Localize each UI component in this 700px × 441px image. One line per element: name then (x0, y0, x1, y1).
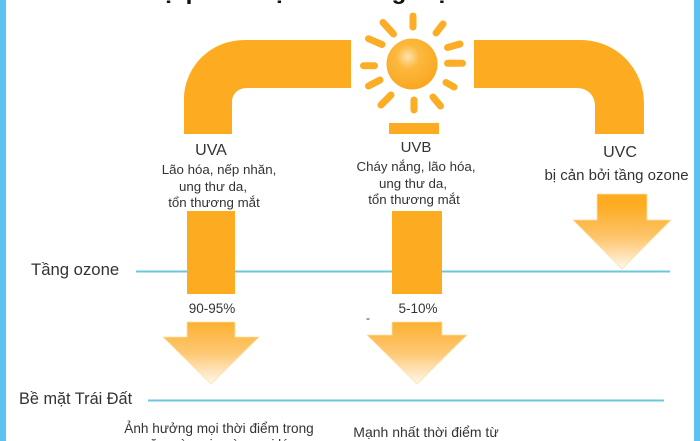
UVB short bar (389, 123, 439, 134)
UVC effect: bị cản bởi tầng ozone (544, 167, 689, 184)
UVB effects: tổn thương mắt (368, 192, 460, 207)
arrow: UVC stopped by ozone (573, 194, 671, 269)
earth surface label: Bề mặt Trái Đất (19, 390, 133, 408)
arrow: UVA to surface (163, 322, 259, 384)
UVA effects: tổn thương mắt (168, 195, 260, 210)
UVC pipe from sun (474, 40, 644, 134)
UVB effects: Cháy nắng, lão hóa, (356, 159, 476, 174)
right border strip (694, 0, 700, 441)
ozone layer line (136, 270, 670, 272)
icon: sun (364, 16, 462, 110)
UVB column through ozone (392, 211, 442, 294)
earth surface line (148, 400, 664, 402)
stray dash: - (366, 311, 370, 325)
left border strip (0, 0, 6, 441)
UVB effects: ung thư da, (379, 176, 447, 191)
UVA note: Ảnh hưởng mọi thời điểm trong (124, 421, 314, 436)
UVA percentage: 90-95% (189, 301, 235, 316)
UVB percentage: 5-10% (398, 301, 438, 316)
UVA label: UVA (195, 142, 227, 159)
UVB label: UVB (401, 139, 431, 156)
UVC label: UVC (603, 144, 637, 161)
UVA column through ozone (187, 211, 235, 294)
arrow: UVB to surface (367, 322, 467, 384)
UVA pipe from sun (184, 40, 351, 134)
UVB note: Mạnh nhất thời điểm từ (353, 424, 499, 440)
UVA effects: ung thư da, (179, 179, 247, 194)
UVA effects: Lão hóa, nếp nhăn, (162, 162, 276, 177)
ozone layer label: Tầng ozone (31, 260, 119, 279)
